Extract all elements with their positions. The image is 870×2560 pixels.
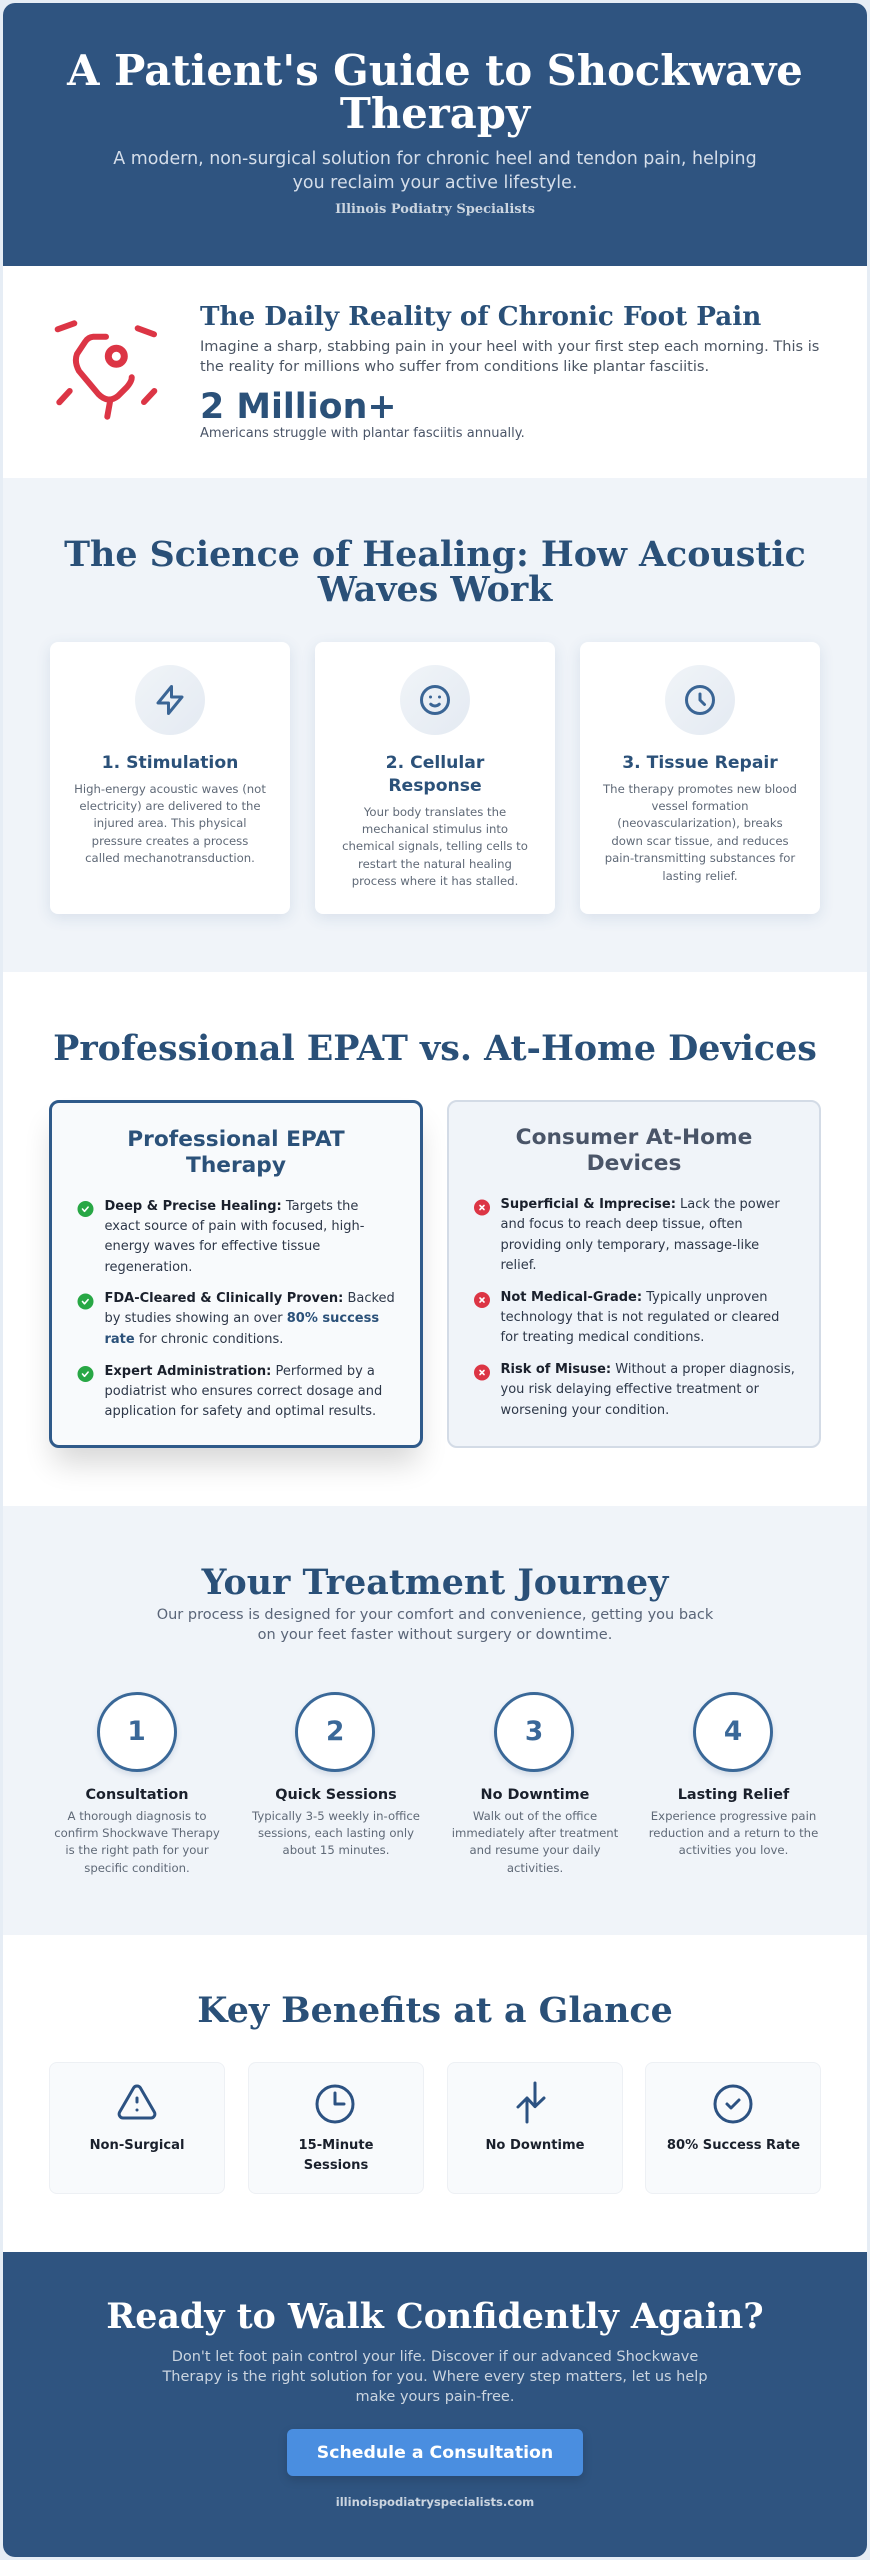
quick sessions text <box>252 1808 420 1857</box>
lasting relief text: reduction and a return to the <box>649 1826 818 1840</box>
at-home item 3: worsening your condition. <box>500 1403 669 1418</box>
step circle 1: 1 <box>127 1716 146 1747</box>
step 3 text: down scar tissue, and reduces <box>611 834 789 848</box>
step circle 2 <box>295 1692 375 1772</box>
website: illinoispodiatryspecialists.com <box>336 2494 534 2508</box>
quick sessions label: Quick Sessions <box>275 1787 397 1803</box>
icons: green checks <box>78 1201 94 1382</box>
statistic caption: Americans struggle with plantar fasciitis annually. <box>200 426 525 441</box>
step circle 3: 3 <box>525 1716 543 1747</box>
professional item 3 <box>104 1364 382 1419</box>
at-home item 1 <box>500 1197 780 1273</box>
benefit label: success: 80% Success Rate <box>667 2138 800 2153</box>
benefit card: quick <box>248 2062 424 2194</box>
journey intro: Our process is designed for your comfort and convenience, getting you back <box>157 1607 713 1623</box>
icon circle: smile <box>400 665 470 735</box>
professional item 1: regeneration. <box>104 1260 192 1275</box>
lasting relief label: Lasting Relief <box>678 1787 789 1803</box>
consultation text: confirm Shockwave Therapy <box>54 1826 220 1840</box>
call to action text: Therapy is the right solution for you. Where every step matters, let us help <box>162 2369 708 2385</box>
no downtime text: immediately after treatment <box>452 1826 618 1840</box>
professional item 1 <box>104 1198 364 1275</box>
practice name: Illinois Podiatry Specialists <box>335 202 535 217</box>
step circle 4: 4 <box>724 1716 742 1747</box>
heading: daily reality: The Daily Reality of Chronic Foot Pain <box>200 301 761 332</box>
call to action text: Don't let foot pain control your life. Discover if our advanced Shockwave <box>172 2348 698 2364</box>
consultation text <box>54 1808 220 1875</box>
benefit label: non-surgical: Non-Surgical <box>90 2138 184 2153</box>
icon: foot pain <box>54 320 158 420</box>
at-home item 1: relief. <box>500 1258 537 1273</box>
step circle 2: 2 <box>326 1716 344 1747</box>
professional heading: Professional EPAT <box>127 1127 345 1152</box>
heading: key benefits: Key Benefits at a Glance <box>197 1990 673 2031</box>
title: A Patient's Guide to Shockwave <box>67 46 803 95</box>
professional item 1: energy waves for effective tissue <box>104 1239 320 1254</box>
subtitle: you reclaim your active lifestyle. <box>293 173 577 193</box>
step 2 text: process where it has stalled. <box>352 874 518 888</box>
at-home item 1: and focus to reach deep tissue, often <box>500 1217 743 1232</box>
step 1 text: pressure creates a process <box>92 834 248 848</box>
header background <box>3 3 867 266</box>
at-home item 2 <box>500 1290 779 1345</box>
heading: science of healing: Waves Work <box>318 568 552 610</box>
step 2 text: Your body translates the <box>364 804 506 818</box>
button: schedule <box>287 2429 583 2476</box>
science section background <box>3 478 867 972</box>
professional item 2 <box>104 1291 395 1347</box>
professional item 3: podiatrist who ensures correct dosage and <box>104 1384 382 1399</box>
at-home item 1: Superficial & Imprecise: Lack the power <box>500 1197 780 1212</box>
consultation label: Consultation <box>86 1787 188 1803</box>
benefit label: sessions: Sessions <box>304 2158 368 2173</box>
professional heading <box>127 1127 345 1178</box>
professional item 3: Expert Administration: Performed by a <box>104 1364 375 1378</box>
professional item 2: FDA-Cleared & Clinically Proven: Backed <box>104 1291 395 1306</box>
at-home item 2: for treating medical conditions. <box>500 1330 704 1345</box>
step 2 text: restart the natural healing <box>358 857 512 871</box>
heading: science of healing: The Science of Healing: How Acoustic <box>64 534 806 574</box>
professional item 2: rate for chronic conditions. <box>104 1332 283 1347</box>
subtitle: A modern, non-surgical solution for chronic heel and tendon pain, helping <box>113 149 757 169</box>
button: schedule: Schedule a Consultation <box>317 2443 553 2463</box>
step 2 heading <box>386 753 484 796</box>
icon circle: bolt <box>135 665 205 735</box>
statistic: 2 Million+ <box>200 387 396 427</box>
benefit card: no downtime <box>447 2062 623 2194</box>
benefit label: sessions: 15-Minute <box>299 2138 373 2153</box>
professional item 1: exact source of pain with focused, high- <box>104 1219 364 1234</box>
professional heading: Therapy <box>186 1153 286 1178</box>
benefit label: downtime: No Downtime <box>485 2138 585 2153</box>
step circle 4 <box>693 1692 773 1772</box>
title <box>66 46 803 138</box>
reality paragraph <box>200 338 819 375</box>
call to action background <box>3 2252 867 2557</box>
lasting relief text: activities you love. <box>679 1843 788 1857</box>
reality paragraph: the reality for millions who suffer from conditions like plantar fasciitis. <box>200 358 709 375</box>
benefit card: success rate <box>645 2062 821 2194</box>
consultation text: specific condition. <box>84 1861 190 1875</box>
step 3 text: pain-transmitting substances for <box>605 851 795 865</box>
step 3 text: vessel formation <box>651 799 749 813</box>
card: stimulation <box>50 642 290 914</box>
step 3 text: The therapy promotes new blood <box>603 782 797 796</box>
quick sessions text: Typically 3-5 weekly in-office <box>252 1808 420 1822</box>
journey intro: on your feet faster without surgery or downtime. <box>258 1627 612 1643</box>
step 1 text: injured area. This physical <box>94 816 246 830</box>
step 3 text: (neovascularization), breaks <box>617 816 783 830</box>
step 2 text: chemical signals, telling cells to <box>342 839 528 853</box>
benefit label: sessions <box>299 2138 373 2173</box>
step 1 text: electricity) are delivered to the <box>79 799 261 813</box>
at-home item 3 <box>500 1362 795 1418</box>
subtitle <box>113 149 757 193</box>
step 1 text: called mechanotransduction. <box>85 851 255 865</box>
icon: check circle <box>714 2084 752 2124</box>
step circle 1 <box>96 1692 176 1772</box>
professional item 2: by studies showing an over 80% success <box>104 1311 379 1326</box>
heading: call to action: Ready to Walk Confidently Again? <box>106 2296 764 2336</box>
at-home item 2: technology that is not regulated or cleared <box>500 1310 779 1325</box>
card: cellular response <box>315 642 555 914</box>
reality section background <box>3 266 867 478</box>
no downtime text: activities. <box>507 1861 563 1875</box>
step circle 3 <box>494 1692 574 1772</box>
journey intro <box>157 1607 714 1643</box>
heading: treatment journey: Your Treatment Journey <box>202 1562 668 1603</box>
at-home item 2: Not Medical-Grade: Typically unproven <box>500 1290 768 1304</box>
icon: clock <box>316 2084 354 2124</box>
step 1 text: High-energy acoustic waves (not <box>74 782 266 796</box>
consultation text: is the right path for your <box>65 1843 209 1857</box>
at-home item 3: you risk delaying effective treatment or <box>500 1382 759 1397</box>
step 2 heading: 2. Cellular <box>386 753 484 773</box>
consultation text: A thorough diagnosis to <box>68 1808 206 1822</box>
at-home heading: Consumer At-Home <box>516 1125 752 1150</box>
no downtime text: Walk out of the office <box>473 1808 597 1822</box>
step 1 text <box>74 782 266 865</box>
icons: red crosses <box>474 1200 490 1380</box>
quick sessions text: about 15 minutes. <box>283 1843 389 1857</box>
step 3 text <box>602 782 797 883</box>
step 1 heading: 1. Stimulation <box>102 753 238 773</box>
no downtime label: No Downtime <box>481 1787 589 1803</box>
icon circle: clock <box>665 665 735 735</box>
lasting relief text <box>649 1808 818 1857</box>
at-home item 1: providing only temporary, massage-like <box>500 1238 759 1253</box>
reality paragraph: Imagine a sharp, stabbing pain in your heel with your first step each morning. This is <box>200 338 819 355</box>
at-home heading: Devices <box>587 1151 681 1176</box>
card: tissue repair <box>580 642 820 914</box>
step 3 text: lasting relief. <box>662 869 738 883</box>
no downtime text: and resume your daily <box>469 1843 601 1857</box>
benefit card: non-surgical <box>49 2062 225 2194</box>
heading: science of healing <box>64 534 806 610</box>
icon: warning triangle <box>118 2084 156 2120</box>
panel: professional EPAT <box>49 1100 423 1448</box>
step 2 heading: Response <box>388 776 482 796</box>
heading: comparison: Professional EPAT vs. At-Home Devices <box>53 1028 817 1069</box>
at-home item 3: Risk of Misuse: Without a proper diagnosis, <box>500 1362 795 1377</box>
call to action text: make yours pain-free. <box>356 2389 514 2405</box>
journey section background <box>3 1506 867 1935</box>
at-home heading <box>516 1125 752 1176</box>
professional item 3: application for safety and optimal results. <box>104 1404 376 1419</box>
call to action text <box>162 2348 708 2405</box>
lasting relief text: Experience progressive pain <box>651 1808 816 1822</box>
step 3 heading: 3. Tissue Repair <box>622 753 778 773</box>
step 2 text: mechanical stimulus into <box>362 822 508 836</box>
panel: at-home devices <box>447 1100 821 1448</box>
quick sessions text: sessions, each lasting only <box>258 1826 414 1840</box>
icon: arrows <box>516 2082 546 2124</box>
no downtime text <box>452 1808 618 1875</box>
professional item 1: Deep & Precise Healing: Targets the <box>104 1198 358 1214</box>
title: Therapy <box>340 89 530 138</box>
step 2 text <box>342 804 528 888</box>
